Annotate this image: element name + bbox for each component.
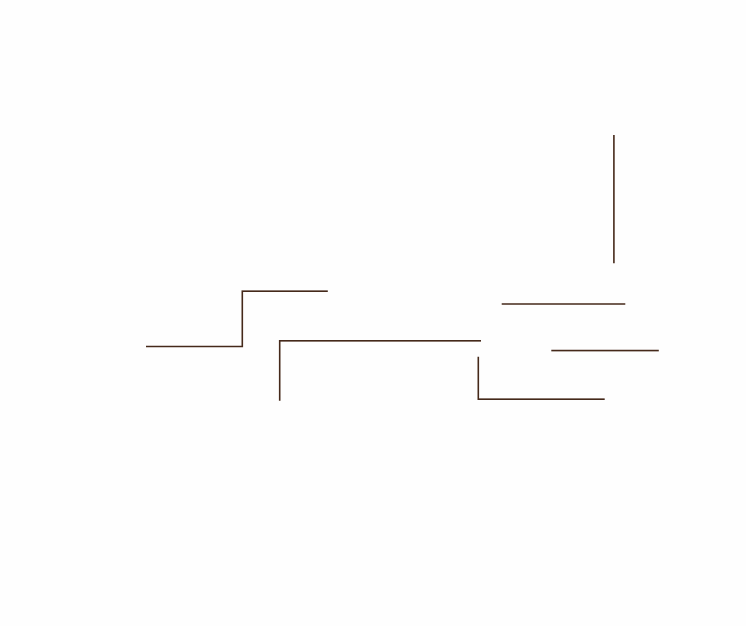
connector: horizontal line middle right [551,350,659,352]
connector: elbow line lower right [478,357,605,399]
connector: elbow line centre [280,341,481,401]
connector: vertical line top right [613,135,615,263]
connector: stepped line left [146,291,328,346]
connector: horizontal line upper right [502,303,625,305]
